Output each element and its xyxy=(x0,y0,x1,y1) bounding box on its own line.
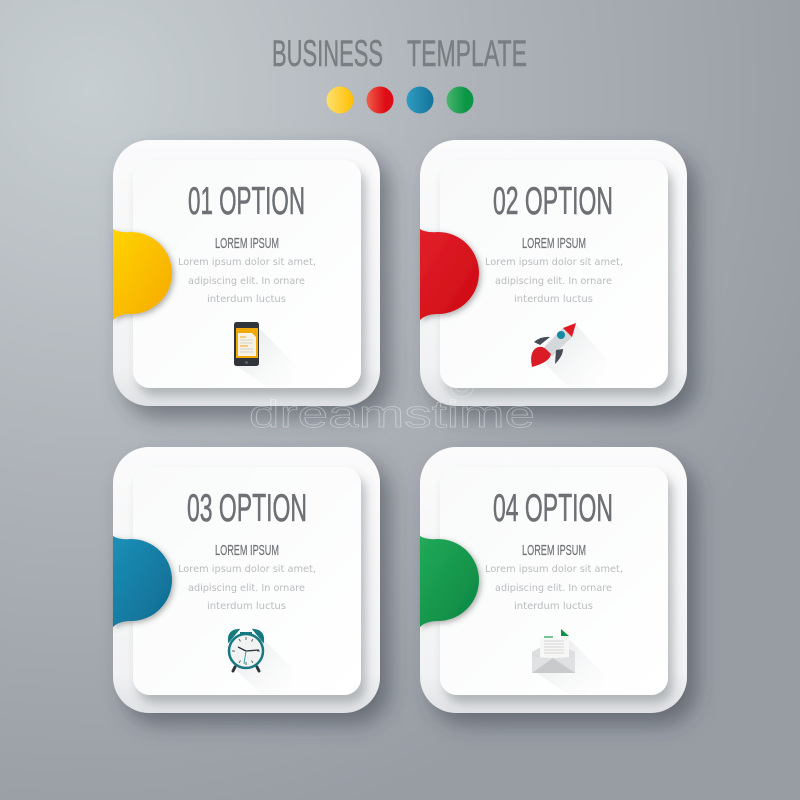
blue tab xyxy=(113,536,172,627)
inner card xyxy=(440,160,668,388)
body text: adipiscing elit. In ornare xyxy=(495,276,612,287)
heading: 04 OPTION xyxy=(493,487,613,530)
green tab xyxy=(420,536,479,627)
body text: Lorem ipsum dolor sit amet, xyxy=(178,257,316,268)
subheading: LOREM IPSUM xyxy=(522,542,586,559)
inner card xyxy=(440,467,668,695)
title: TEMPLATE xyxy=(407,33,527,74)
watermark xyxy=(249,373,535,436)
icon: smartphone xyxy=(234,322,295,388)
heading: 03 OPTION xyxy=(187,487,307,530)
body text: Lorem ipsum dolor sit amet, xyxy=(178,564,316,575)
inner card xyxy=(133,160,361,388)
red tab xyxy=(420,229,479,320)
body text: Lorem ipsum dolor sit amet, xyxy=(485,257,623,268)
panel: option 01 xyxy=(113,140,380,406)
body text: adipiscing elit. In ornare xyxy=(495,583,612,594)
yellow tab xyxy=(113,229,172,320)
body text xyxy=(178,564,316,612)
heading: 01 OPTION xyxy=(188,180,305,223)
body text xyxy=(485,257,623,305)
body text xyxy=(485,564,623,612)
panel: option 02 xyxy=(420,140,687,406)
title: BUSINESS xyxy=(272,33,383,74)
subheading: LOREM IPSUM xyxy=(215,235,279,252)
colour dots xyxy=(326,86,474,114)
body text: Lorem ipsum dolor sit amet, xyxy=(485,564,623,575)
subheading: LOREM IPSUM xyxy=(522,235,586,252)
outer card xyxy=(113,140,380,406)
body text: interdum luctus xyxy=(207,601,286,612)
panel: option 03 xyxy=(113,447,380,713)
icon: alarm clock xyxy=(229,630,292,695)
outer card xyxy=(420,140,687,406)
watermark: dreamstime xyxy=(249,394,535,436)
body text: interdum luctus xyxy=(207,294,286,305)
outer card xyxy=(420,447,687,713)
heading: 02 OPTION xyxy=(493,180,613,223)
body text: interdum luctus xyxy=(514,601,593,612)
body text: interdum luctus xyxy=(514,294,593,305)
icon: envelope xyxy=(532,629,604,695)
icon: rocket xyxy=(531,323,606,388)
body text: adipiscing elit. In ornare xyxy=(188,276,305,287)
body text: adipiscing elit. In ornare xyxy=(188,583,305,594)
panel: option 04 xyxy=(420,447,687,713)
subheading: LOREM IPSUM xyxy=(215,542,279,559)
inner card xyxy=(133,467,361,695)
outer card xyxy=(113,447,380,713)
body text xyxy=(178,257,316,305)
